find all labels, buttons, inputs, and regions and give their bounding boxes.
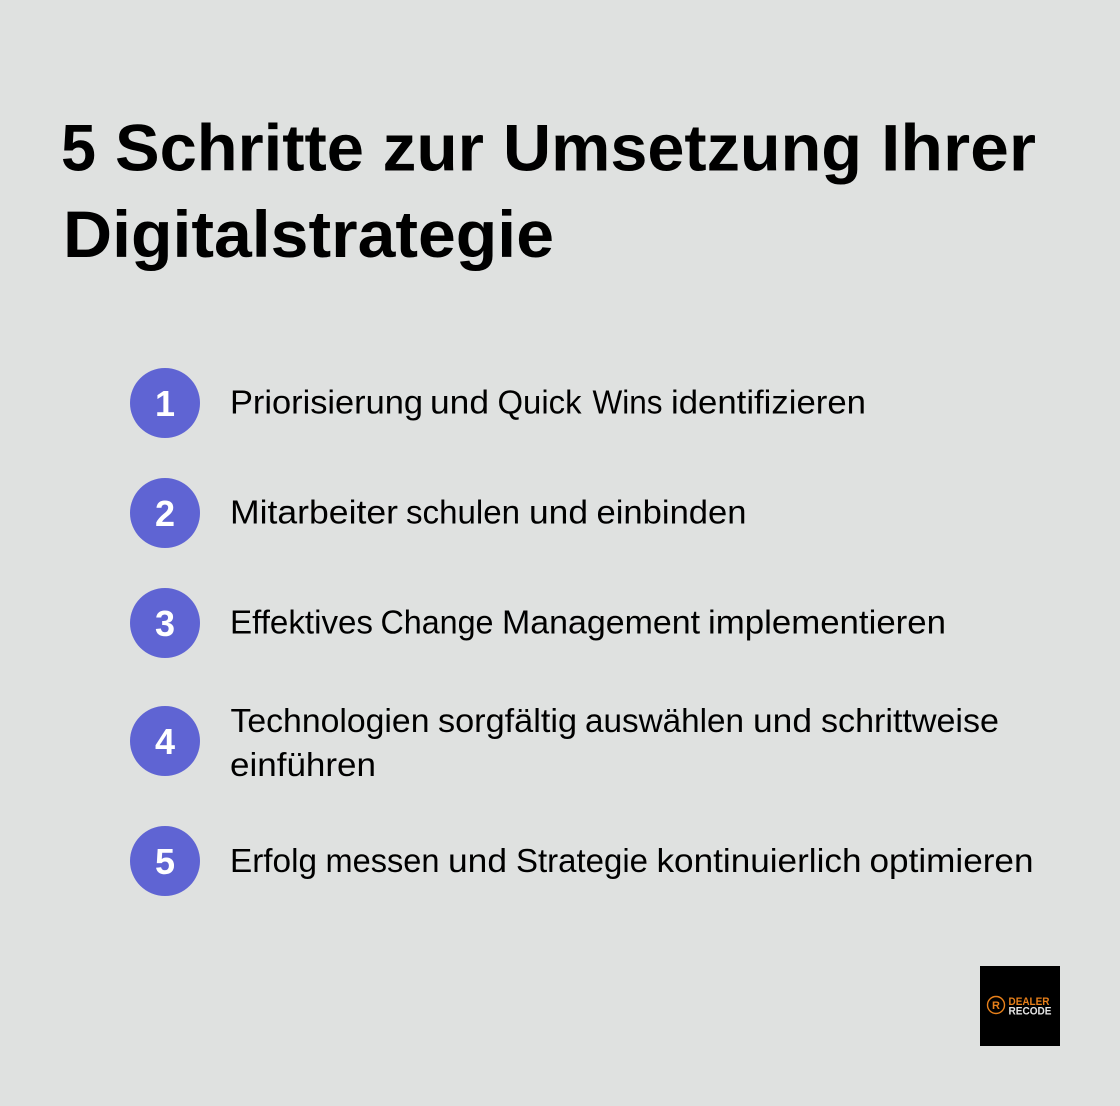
step 1 badge xyxy=(130,368,200,438)
step 3 text: Management xyxy=(502,604,700,640)
step 5 text: messen xyxy=(326,842,440,879)
step 5 badge: 5 xyxy=(155,841,175,882)
step 3 text: Effektives xyxy=(230,604,373,640)
step 3 text: Change xyxy=(380,604,494,640)
step 4 badge: 4 xyxy=(155,721,175,762)
step 1 text xyxy=(230,384,866,420)
logo: Dealer Recode xyxy=(980,966,1060,1046)
step 1 badge: 1 xyxy=(155,383,175,424)
step 1 text: Priorisierung xyxy=(230,384,423,420)
logo: Dealer Recode: DEALER xyxy=(1008,996,1050,1008)
step 5 xyxy=(130,826,1034,896)
step 5 text: und xyxy=(448,842,507,879)
step 4 text: auswählen xyxy=(585,702,744,739)
logo: Dealer Recode: RECODE xyxy=(1008,1006,1052,1018)
step 2 text xyxy=(230,494,746,530)
step 2 badge xyxy=(130,478,200,548)
step 3 badge: 3 xyxy=(155,603,175,644)
step 3 xyxy=(130,588,946,658)
step 5 text: optimieren xyxy=(870,842,1034,879)
step 4 badge xyxy=(130,706,200,776)
step 5 badge xyxy=(130,826,200,896)
title: 5 xyxy=(61,110,96,184)
step 5 text xyxy=(230,842,1034,879)
step 1 text: und xyxy=(430,384,489,420)
step 2 badge: 2 xyxy=(155,493,175,534)
title: Umsetzung xyxy=(503,110,862,184)
step 1 xyxy=(130,368,866,438)
step 2 text: einbinden xyxy=(596,494,746,530)
step 5 text: Strategie xyxy=(516,842,648,879)
step 4 xyxy=(130,702,999,783)
title: zur xyxy=(382,110,484,184)
step 3 badge xyxy=(130,588,200,658)
step 4 text xyxy=(230,702,999,783)
step 3 text: implementieren xyxy=(708,604,946,640)
step 4 text: Technologien xyxy=(230,702,430,739)
step 1 text: Quick xyxy=(498,384,582,420)
step 5 text: kontinuierlich xyxy=(656,842,862,879)
step 2 xyxy=(130,478,746,548)
step 5 text: Erfolg xyxy=(230,842,317,879)
step 2 text: Mitarbeiter xyxy=(230,494,398,530)
title xyxy=(61,110,1036,271)
step 2 text: schulen xyxy=(406,494,520,530)
logo: Dealer Recode: R xyxy=(992,1000,1000,1012)
step list xyxy=(130,368,1034,896)
step 4 text: sorgfältig xyxy=(438,702,577,739)
title: Schritte xyxy=(115,110,364,184)
step 3 text xyxy=(230,604,946,640)
step 4 text: schrittweise xyxy=(821,702,999,739)
step 4 text: einführen xyxy=(230,746,376,783)
title: Digitalstrategie xyxy=(63,197,554,271)
step 4 text: und xyxy=(753,702,812,739)
step 1 text: identifizieren xyxy=(671,384,866,420)
title: Ihrer xyxy=(881,110,1036,184)
step 1 text: Wins xyxy=(592,384,662,420)
step 2 text: und xyxy=(529,494,588,530)
